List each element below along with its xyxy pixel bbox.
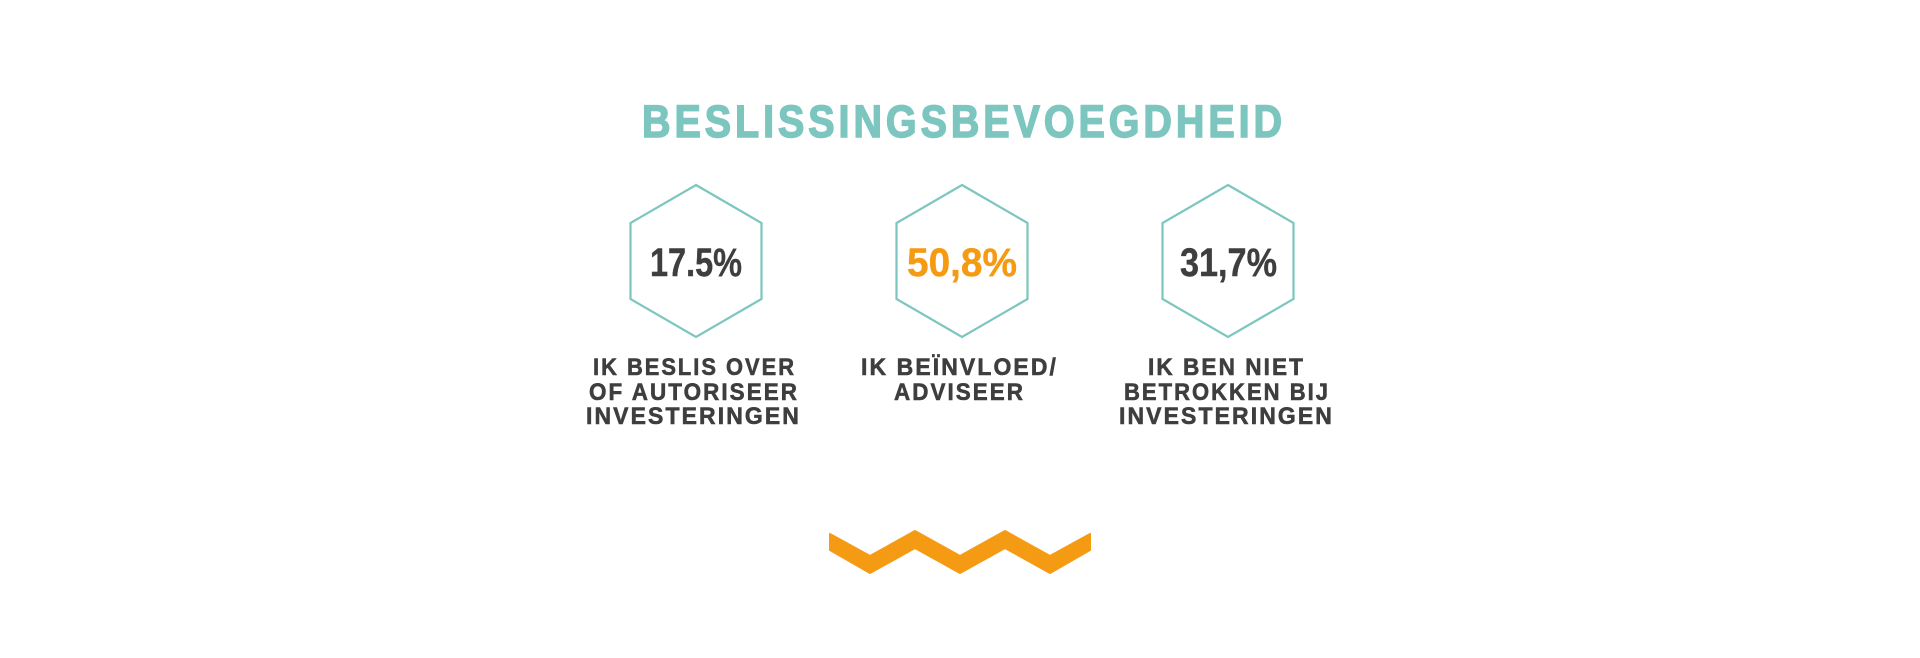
value: 17.5%: 17.5% xyxy=(650,241,742,285)
label: ik ben niet betrokken: BETROKKEN BIJ xyxy=(1124,379,1330,406)
icon: hexagon 3 xyxy=(1162,185,1294,337)
value: 31,7%: 31,7% xyxy=(1180,241,1277,285)
label: ik beinvloed: ADVISEER xyxy=(894,379,1025,406)
panel: ik beslis xyxy=(586,185,801,430)
label: ik ben niet betrokken xyxy=(1119,354,1334,430)
label: ik beinvloed xyxy=(861,354,1058,406)
icon: hexagon 2 xyxy=(896,185,1028,337)
label: ik beslis: INVESTERINGEN xyxy=(586,403,801,430)
label: ik beslis xyxy=(586,354,801,430)
label: ik beinvloed: IK BEÏNVLOED/ xyxy=(861,354,1058,381)
icon: hexagon 1 xyxy=(630,185,762,337)
icon: orange zigzag xyxy=(830,531,1090,573)
panel: ik ben niet betrokken xyxy=(1119,185,1334,430)
label: ik ben niet betrokken: INVESTERINGEN xyxy=(1119,403,1334,430)
title: BESLISSINGSBEVOEGDHEID xyxy=(642,96,1286,147)
label: ik beslis: IK BESLIS OVER xyxy=(593,354,796,381)
label: ik ben niet betrokken: IK BEN NIET xyxy=(1148,354,1305,381)
value: 50,8%: 50,8% xyxy=(907,241,1017,285)
label: ik beslis: OF AUTORISEER xyxy=(589,379,799,406)
panel: ik beinvloed xyxy=(861,185,1058,406)
